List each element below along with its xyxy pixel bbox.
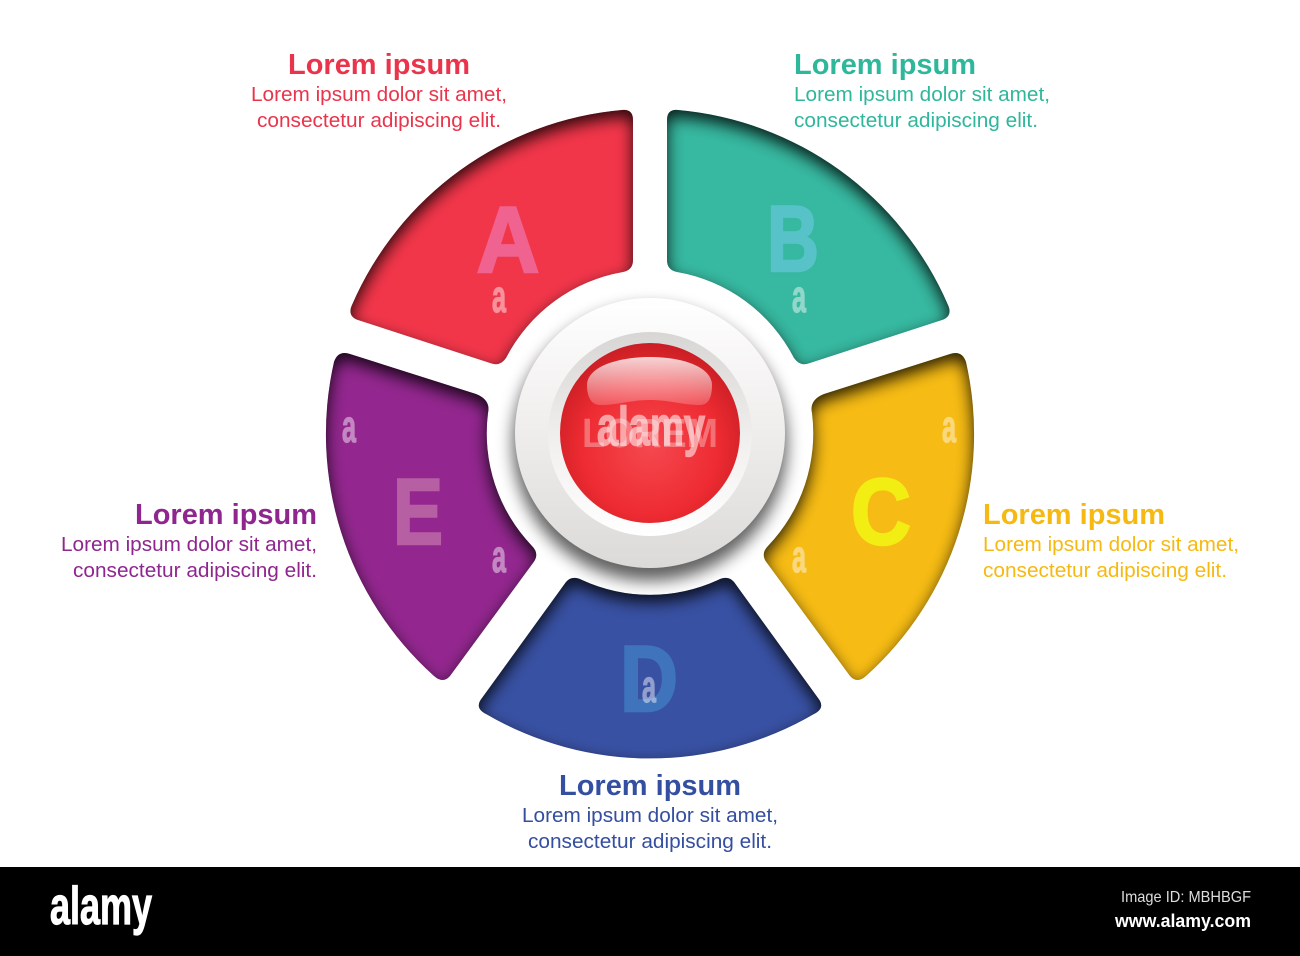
panel: segment E bbox=[326, 353, 536, 680]
watermark a: a bbox=[792, 271, 807, 322]
heading A: Lorem ipsum bbox=[288, 49, 470, 81]
center label: LOREM bbox=[582, 410, 718, 456]
button drop shadow bbox=[513, 307, 787, 581]
letter A: A bbox=[476, 187, 540, 292]
body B line 1: Lorem ipsum dolor sit amet, bbox=[794, 84, 1050, 106]
letter C: C bbox=[851, 459, 911, 564]
center button bbox=[513, 298, 787, 581]
segment A shape bbox=[350, 110, 633, 364]
body D line 2: consectetur adipiscing elit. bbox=[528, 831, 772, 853]
watermark a: a bbox=[642, 661, 657, 712]
body E line 1: Lorem ipsum dolor sit amet, bbox=[61, 534, 317, 556]
text block D bbox=[522, 770, 778, 853]
inner ring bbox=[548, 332, 752, 536]
website: www.alamy.com bbox=[1114, 911, 1251, 931]
letter E: E bbox=[393, 459, 443, 564]
body A line 1: Lorem ipsum dolor sit amet, bbox=[251, 84, 507, 106]
body A line 2: consectetur adipiscing elit. bbox=[257, 110, 501, 132]
segment C shape bbox=[764, 353, 974, 680]
watermark a: a bbox=[942, 401, 957, 452]
panel: segment B bbox=[667, 110, 950, 364]
image id: Image ID: MBHBGF bbox=[1121, 889, 1251, 906]
body E line 2: consectetur adipiscing elit. bbox=[73, 560, 317, 582]
panel: segment A bbox=[350, 110, 633, 364]
sphere highlight bbox=[587, 357, 712, 405]
heading D: Lorem ipsum bbox=[559, 770, 741, 802]
body C line 2: consectetur adipiscing elit. bbox=[983, 560, 1227, 582]
footer logo: alamy bbox=[50, 877, 152, 936]
text block E bbox=[61, 499, 317, 582]
letter B: B bbox=[767, 186, 819, 291]
footer background bbox=[0, 867, 1300, 956]
heading E: Lorem ipsum bbox=[135, 499, 317, 531]
segment D shape bbox=[479, 578, 821, 758]
segment E shape bbox=[326, 353, 536, 680]
heading C: Lorem ipsum bbox=[983, 499, 1165, 531]
center watermark: alamy bbox=[597, 395, 705, 457]
text block A bbox=[251, 49, 507, 132]
watermark a: a bbox=[492, 271, 507, 322]
text block C bbox=[983, 499, 1239, 582]
watermark a: a bbox=[492, 531, 507, 582]
red glossy sphere bbox=[560, 343, 740, 523]
outer ring bbox=[515, 298, 785, 568]
heading B: Lorem ipsum bbox=[794, 49, 976, 81]
body C line 1: Lorem ipsum dolor sit amet, bbox=[983, 534, 1239, 556]
panel: segment D bbox=[479, 578, 821, 758]
watermark a: a bbox=[792, 531, 807, 582]
panel: segment C bbox=[764, 353, 974, 680]
body B line 2: consectetur adipiscing elit. bbox=[794, 110, 1038, 132]
text block B bbox=[794, 49, 1050, 132]
body D line 1: Lorem ipsum dolor sit amet, bbox=[522, 805, 778, 827]
footer bar bbox=[0, 867, 1300, 956]
letter D: D bbox=[620, 626, 678, 731]
segment B shape bbox=[667, 110, 950, 364]
watermark a: a bbox=[342, 401, 357, 452]
